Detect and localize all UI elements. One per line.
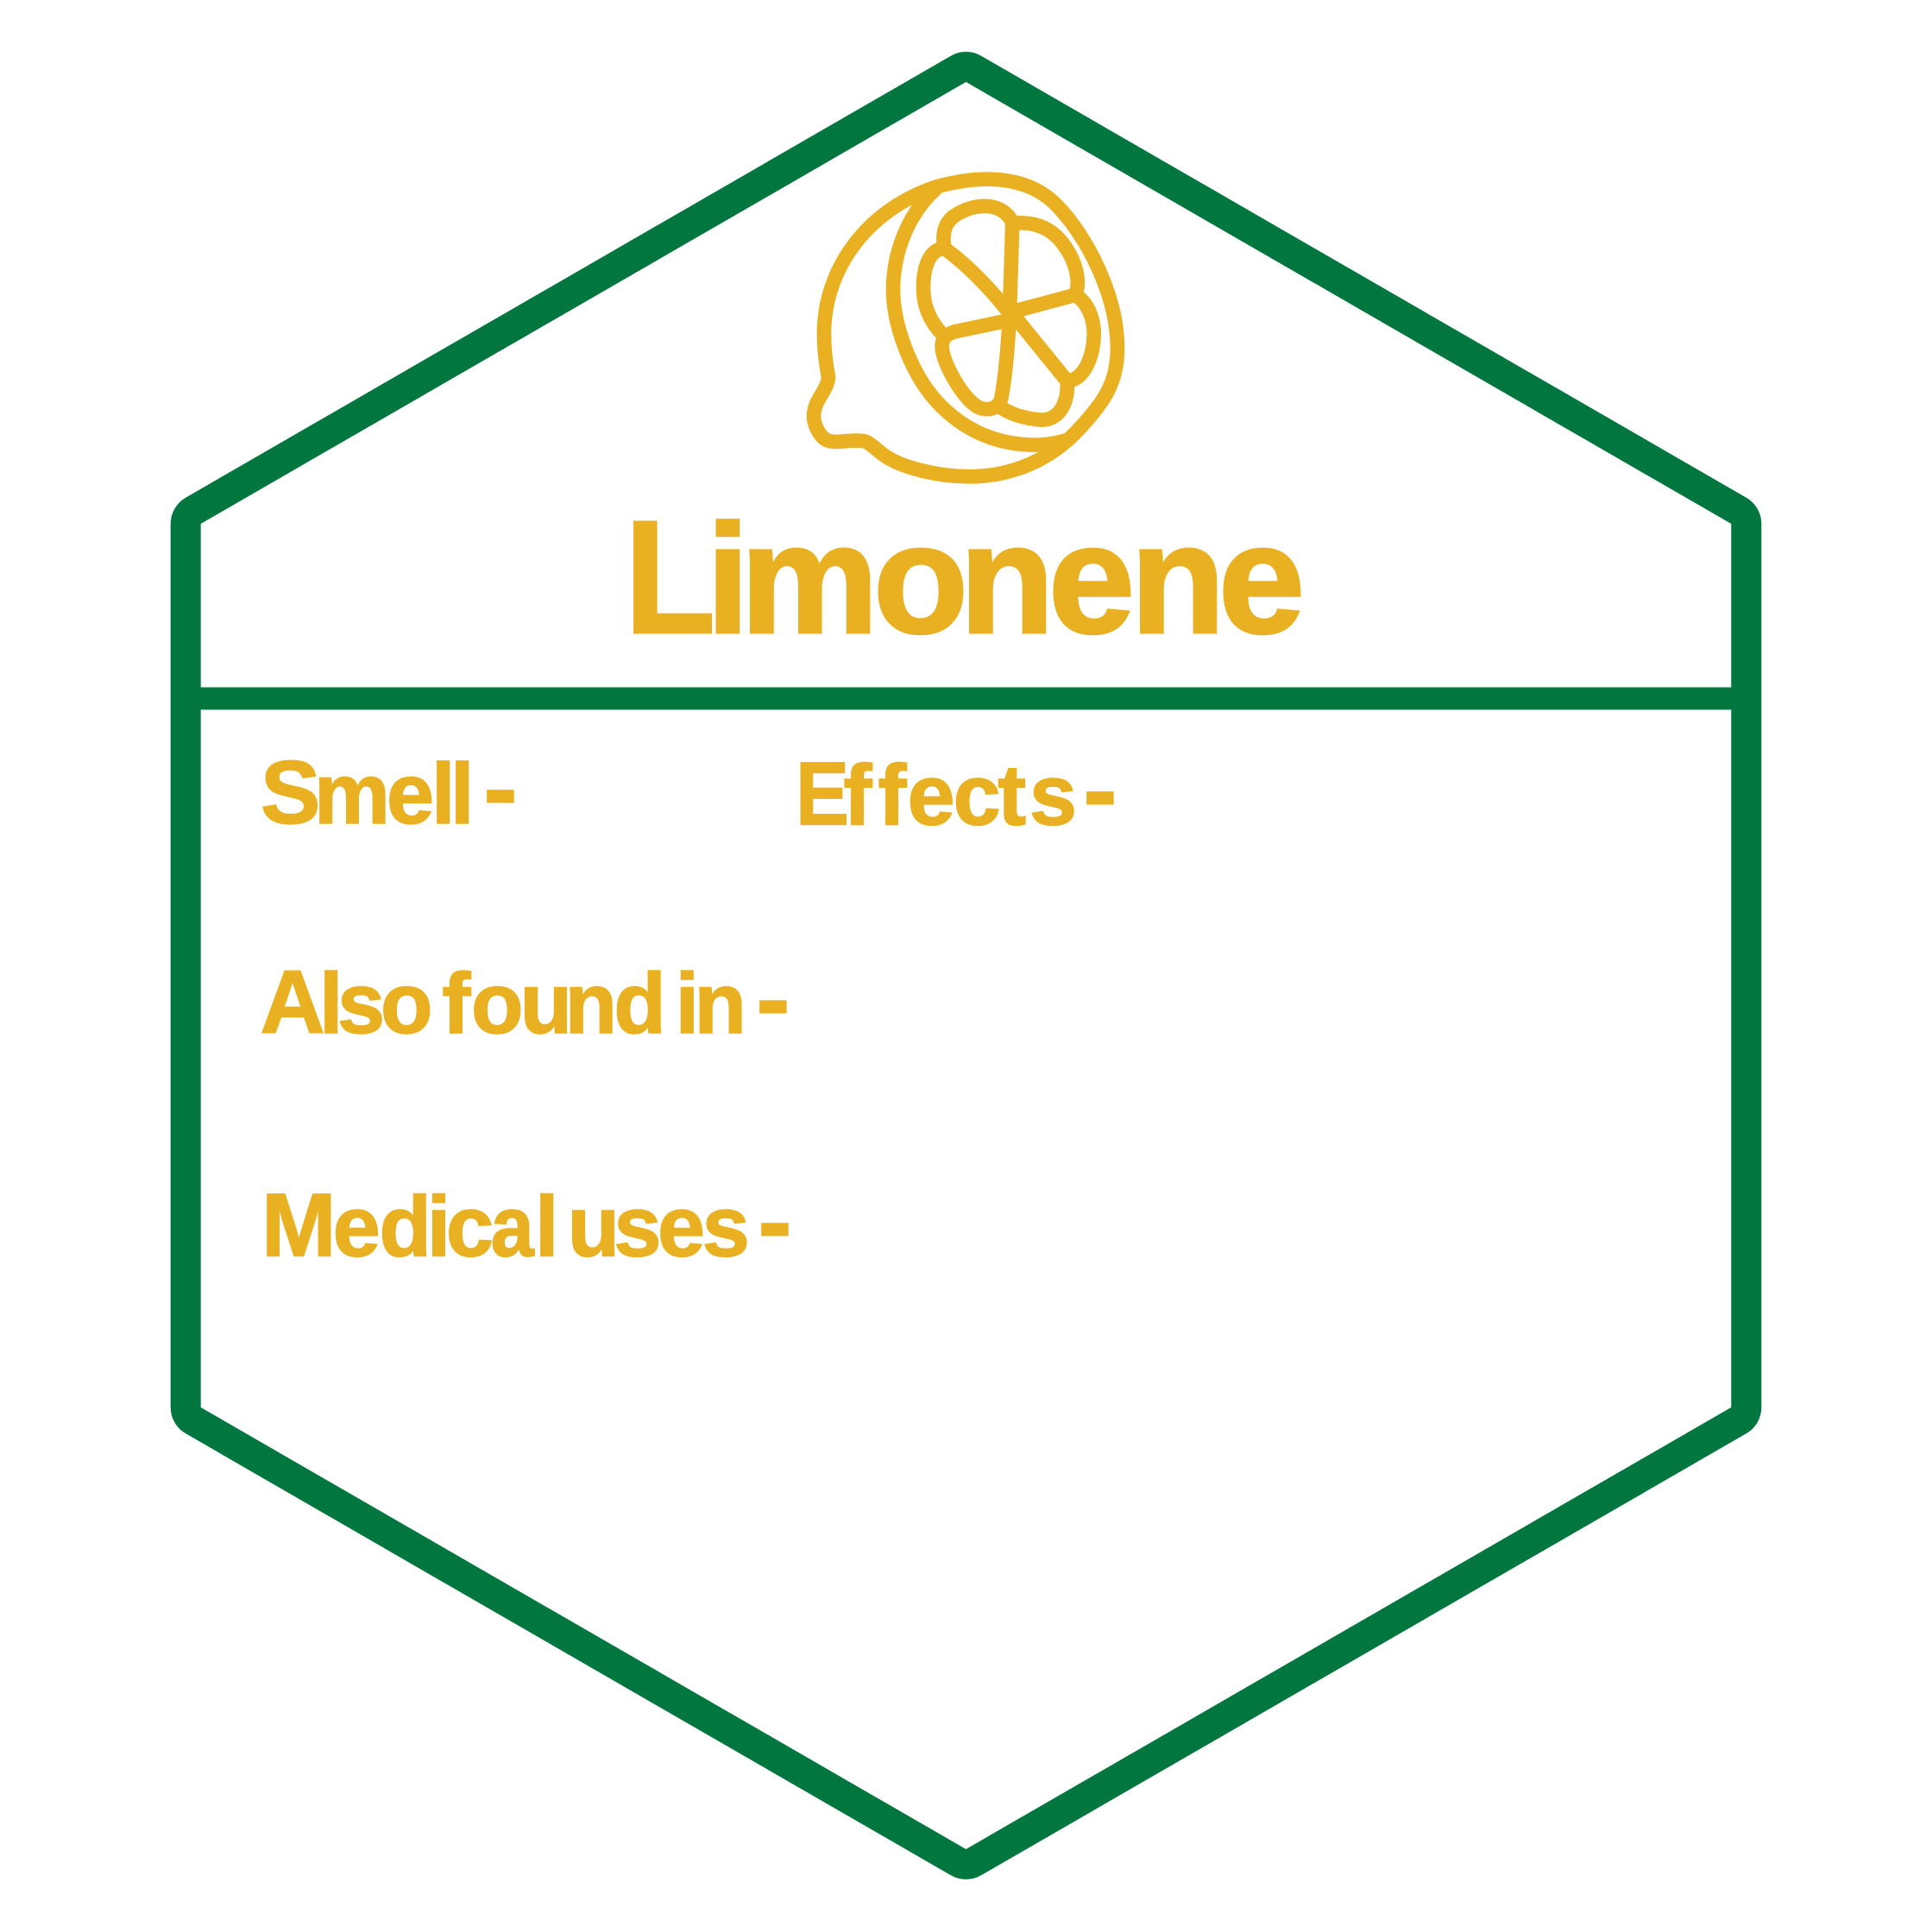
label: Medical uses: - (758, 1163, 792, 1279)
label: Medical uses: a (491, 1179, 535, 1274)
divider bar (200, 687, 1732, 709)
title: L (625, 488, 715, 667)
label: Also found in: lso found in (319, 955, 746, 1051)
label: Also found in: - (756, 941, 790, 1056)
label: Also found in (261, 941, 790, 1056)
label: Smell: mell (314, 746, 475, 841)
label: Smell: - (483, 730, 518, 846)
label: Effects: E (796, 744, 849, 844)
label: Effects: ffects (844, 747, 1077, 842)
label: Effects (796, 732, 1117, 847)
label: Medical uses: M (261, 1175, 337, 1275)
icon: lemon (814, 179, 1117, 476)
label: Also found in: A (261, 953, 325, 1053)
lemon segments (923, 206, 1094, 420)
lemon cut rind (893, 188, 1065, 445)
label: Medical uses: l uses (535, 1179, 750, 1274)
label: Smell (261, 730, 518, 846)
label: Effects: - (1083, 732, 1117, 847)
label: Medical uses: edic (333, 1179, 494, 1274)
label: Smell: S (261, 743, 320, 843)
lemon outer body (814, 179, 1117, 476)
title: imonene (706, 493, 1305, 666)
hexagon frame (201, 82, 1731, 1849)
label: Medical uses (261, 1163, 792, 1279)
